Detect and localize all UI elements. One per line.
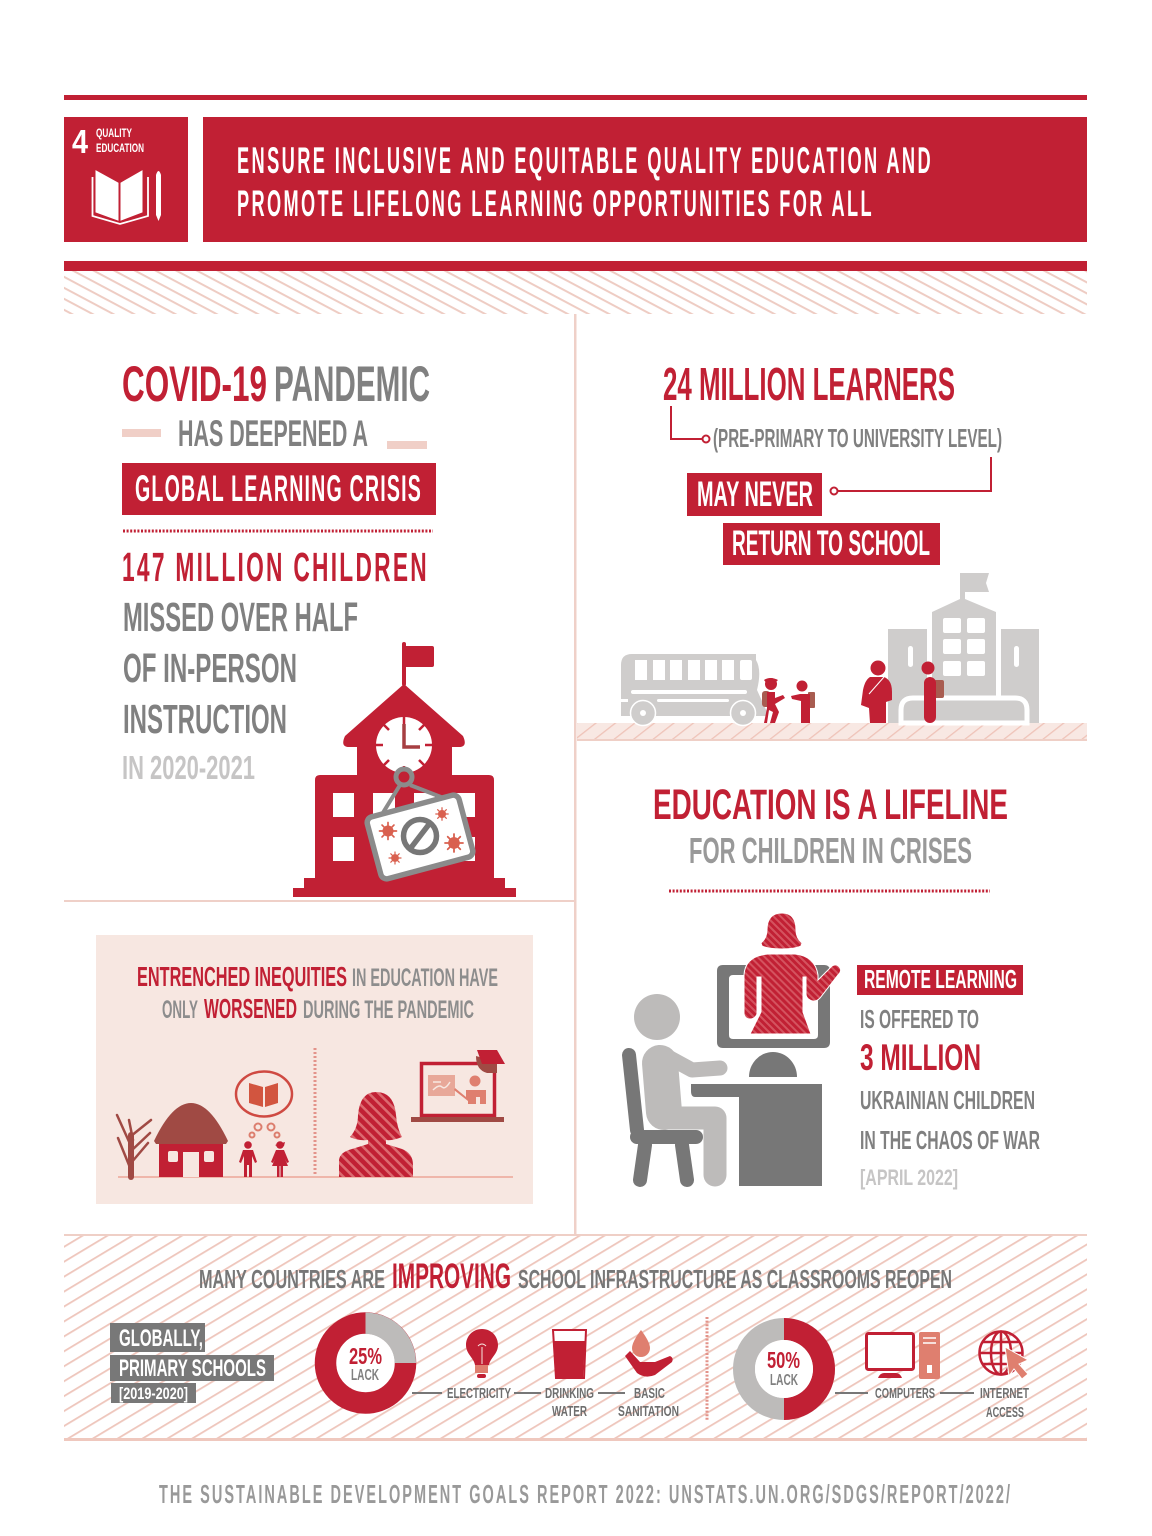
label: globally, primary schools: GLOBALLY, <box>119 1325 203 1352</box>
icon: woman silhouette <box>339 1092 413 1177</box>
heading text: DURING THE PANDEMIC <box>303 996 474 1024</box>
icon: laptop online class <box>411 1050 505 1122</box>
callout: return to school: RETURN TO SCHOOL <box>732 524 930 563</box>
goal name: QUALITY <box>96 128 132 140</box>
icon: bare tree <box>117 1115 151 1177</box>
icon: adult with satchel <box>861 660 892 723</box>
heading text: IN EDUCATION HAVE <box>352 964 498 992</box>
statistic: 147 million children: 147 MILLION CHILDREN <box>122 544 429 590</box>
donut chart: 50% lack <box>744 1318 835 1420</box>
chair <box>629 1055 696 1180</box>
label: basic sanitation: SANITATION <box>618 1403 679 1420</box>
text: remote learning: UKRAINIAN CHILDREN <box>860 1085 1035 1115</box>
heading <box>199 1257 952 1296</box>
goal name: EDUCATION <box>96 143 144 155</box>
label: drinking water: WATER <box>552 1403 587 1420</box>
statistic: 147 million children: INSTRUCTION <box>123 696 287 742</box>
callout: global learning crisis: GLOBAL LEARNING CRISIS <box>135 468 422 509</box>
subheading <box>122 413 427 454</box>
donut chart: 25% lack: LACK <box>351 1367 379 1384</box>
heading text: WORSENED <box>204 993 297 1024</box>
icon: closed school <box>293 642 516 897</box>
label: computers: COMPUTERS <box>875 1385 935 1402</box>
heading: covid-19 pandemic: COVID-19 <box>122 356 267 412</box>
panel: education is a lifeline <box>629 781 1040 1190</box>
header banner <box>203 117 1087 242</box>
label: internet access <box>980 1385 1029 1421</box>
goal name <box>96 128 144 155</box>
callout: may never <box>687 473 822 516</box>
donut chart: 50% lack: 50% <box>767 1347 800 1373</box>
callout: may never: MAY NEVER <box>697 475 813 514</box>
label: globally, primary schools <box>110 1323 274 1403</box>
SDG 4 logo tile <box>64 117 188 242</box>
icon: adult with backpack <box>922 662 944 723</box>
donut chart: 25% lack <box>326 1312 416 1403</box>
icon: girl with backpack <box>762 678 785 723</box>
text: remote learning: [APRIL 2022] <box>860 1165 958 1190</box>
top rule <box>64 95 1087 100</box>
heading text <box>137 961 498 1024</box>
heading text: ENTRENCHED INEQUITIES <box>137 961 347 992</box>
connector arrow: level note to may never <box>830 457 991 494</box>
icon: hand and water drop <box>625 1330 673 1377</box>
text: remote learning: IS OFFERED TO <box>860 1004 979 1034</box>
icon: light bulb <box>466 1329 498 1378</box>
statistic: 147 million children: MISSED OVER HALF <box>123 594 358 640</box>
label: globally, primary schools: [2019-2020] <box>119 1384 188 1403</box>
statistic: 147 million children: OF IN-PERSON <box>123 645 297 691</box>
donut chart: 25% lack: 25% <box>349 1343 382 1369</box>
icon: thatched house <box>154 1103 228 1177</box>
hatched band under header <box>64 261 1087 314</box>
panel: covid learning crisis <box>122 356 516 897</box>
panel dividers <box>64 314 576 1234</box>
panel: entrenched inequities <box>96 935 533 1204</box>
label: electricity: ELECTRICITY <box>447 1385 511 1402</box>
icon: open book and pencil <box>92 171 161 224</box>
icon: globe with cursor <box>980 1331 1028 1379</box>
text: remote learning: 3 MILLION <box>860 1037 981 1078</box>
text: remote learning: REMOTE LEARNING <box>864 964 1017 994</box>
subheading: FOR CHILDREN IN CRISES <box>689 830 972 871</box>
connector lines <box>412 1392 974 1394</box>
goal number: 4 <box>72 123 89 160</box>
panel: 24 million learners <box>577 358 1087 741</box>
icon: boy with backpack <box>791 680 815 723</box>
label: internet access: INTERNET <box>980 1385 1029 1402</box>
icon: student at remote class <box>629 913 841 1186</box>
connector arrow: learners to level note <box>671 406 710 442</box>
statistic: 147 million children: IN 2020-2021 <box>122 749 255 786</box>
donut chart: 50% lack: LACK <box>770 1372 798 1389</box>
label: drinking water <box>545 1385 594 1420</box>
label: internet access: ACCESS <box>986 1404 1024 1421</box>
monitor <box>717 965 830 1077</box>
panel: improving school infrastructure <box>64 1234 1087 1441</box>
text: remote learning <box>857 964 1040 1190</box>
label: basic sanitation: BASIC <box>634 1385 665 1402</box>
heading: MANY COUNTRIES ARE <box>199 1264 385 1294</box>
heading text: ONLY <box>162 996 198 1024</box>
icon: boy and girl <box>239 1141 289 1177</box>
heading: covid-19 pandemic: PANDEMIC <box>274 356 430 412</box>
callout: return to school <box>723 523 940 565</box>
heading: IMPROVING <box>392 1257 511 1296</box>
statistic: 147 million children <box>122 544 429 786</box>
student <box>634 994 720 1175</box>
desk <box>691 1084 822 1186</box>
callout: global learning crisis <box>122 463 436 515</box>
illustration: bus, children and school <box>577 573 1087 741</box>
icon: desktop computer <box>866 1332 940 1379</box>
icon: thought bubble with book <box>236 1072 292 1138</box>
text: remote learning: IN THE CHAOS OF WAR <box>860 1125 1040 1155</box>
icon: school building <box>888 573 1039 723</box>
icon: glass of water <box>553 1330 586 1378</box>
label: drinking water: DRINKING <box>545 1385 594 1402</box>
teacher <box>744 913 841 1034</box>
icon: school bus <box>621 654 767 726</box>
label: basic sanitation <box>618 1385 679 1420</box>
ground strip <box>577 723 1087 741</box>
label: globally, primary schools: PRIMARY SCHOOLS <box>119 1355 266 1382</box>
subheading: HAS DEEPENED A <box>178 413 368 454</box>
